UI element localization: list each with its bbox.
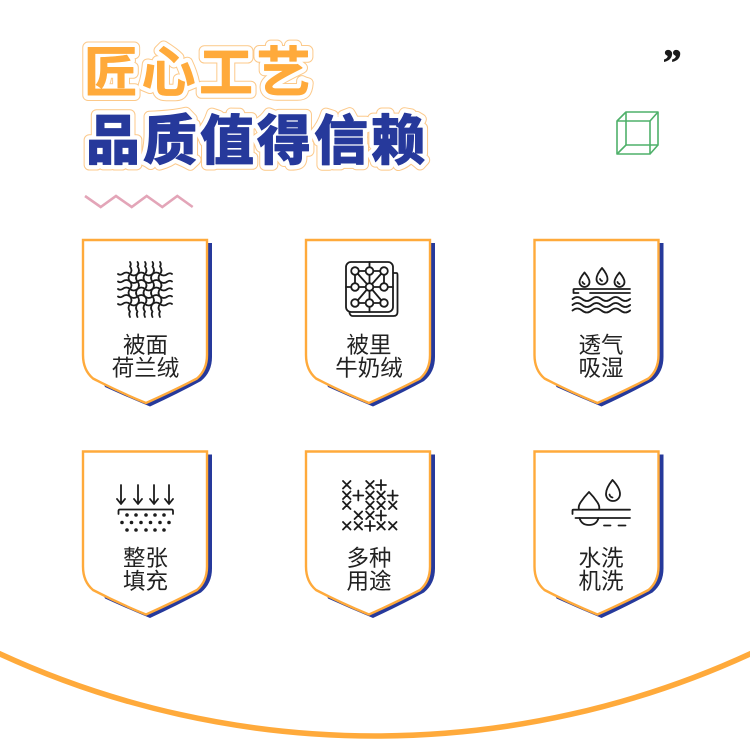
- zigzag decoration: [85, 196, 193, 207]
- closing quote mark: ”: [663, 43, 682, 84]
- panel: 被面荷兰绒: [83, 240, 212, 406]
- label: 吸湿: [578, 356, 624, 381]
- panel: 被里牛奶绒: [306, 240, 435, 406]
- label: 填充: [123, 569, 168, 594]
- shield: [534, 240, 664, 406]
- title line 2: 品质值得信赖: [86, 112, 428, 172]
- title line 1: 匠心工艺: [84, 44, 314, 104]
- label: 透气: [578, 333, 624, 358]
- label: 多种: [346, 546, 392, 571]
- title: [84, 44, 428, 172]
- shield: [306, 452, 435, 618]
- icon: breathable layers with drops: [572, 268, 630, 312]
- title line 2: 品质值得信赖: [86, 112, 428, 172]
- icon: crosses and plus marks: [343, 480, 398, 531]
- label: 用途: [346, 569, 392, 594]
- icon: downward arrows over filling: [117, 485, 173, 532]
- label: 水洗: [578, 546, 624, 571]
- panel: 整张填充: [83, 452, 212, 618]
- label: 被面: [123, 333, 168, 358]
- icon: fibre network square: [346, 262, 398, 316]
- label: 整张: [123, 546, 168, 571]
- label: 被里: [346, 333, 392, 358]
- panel: 多种用途: [306, 452, 435, 618]
- icon: green wireframe cube: [617, 112, 658, 154]
- label: 牛奶绒: [335, 356, 403, 381]
- shield: [83, 240, 212, 406]
- label: 荷兰绒: [112, 356, 179, 381]
- shield: [534, 452, 664, 618]
- title line 1: 匠心工艺: [84, 44, 314, 104]
- panel: 透气吸湿: [534, 240, 664, 406]
- shield: [83, 452, 212, 618]
- bottom orange arc: [0, 653, 750, 736]
- title line 2: 品质值得信赖: [86, 112, 428, 172]
- label: 机洗: [578, 569, 624, 594]
- icon: water drops on layers: [572, 480, 630, 526]
- panel: 水洗机洗: [534, 452, 664, 618]
- shield: [306, 240, 435, 406]
- icon: woven fabric: [118, 262, 172, 317]
- title line 1: 匠心工艺: [84, 44, 314, 104]
